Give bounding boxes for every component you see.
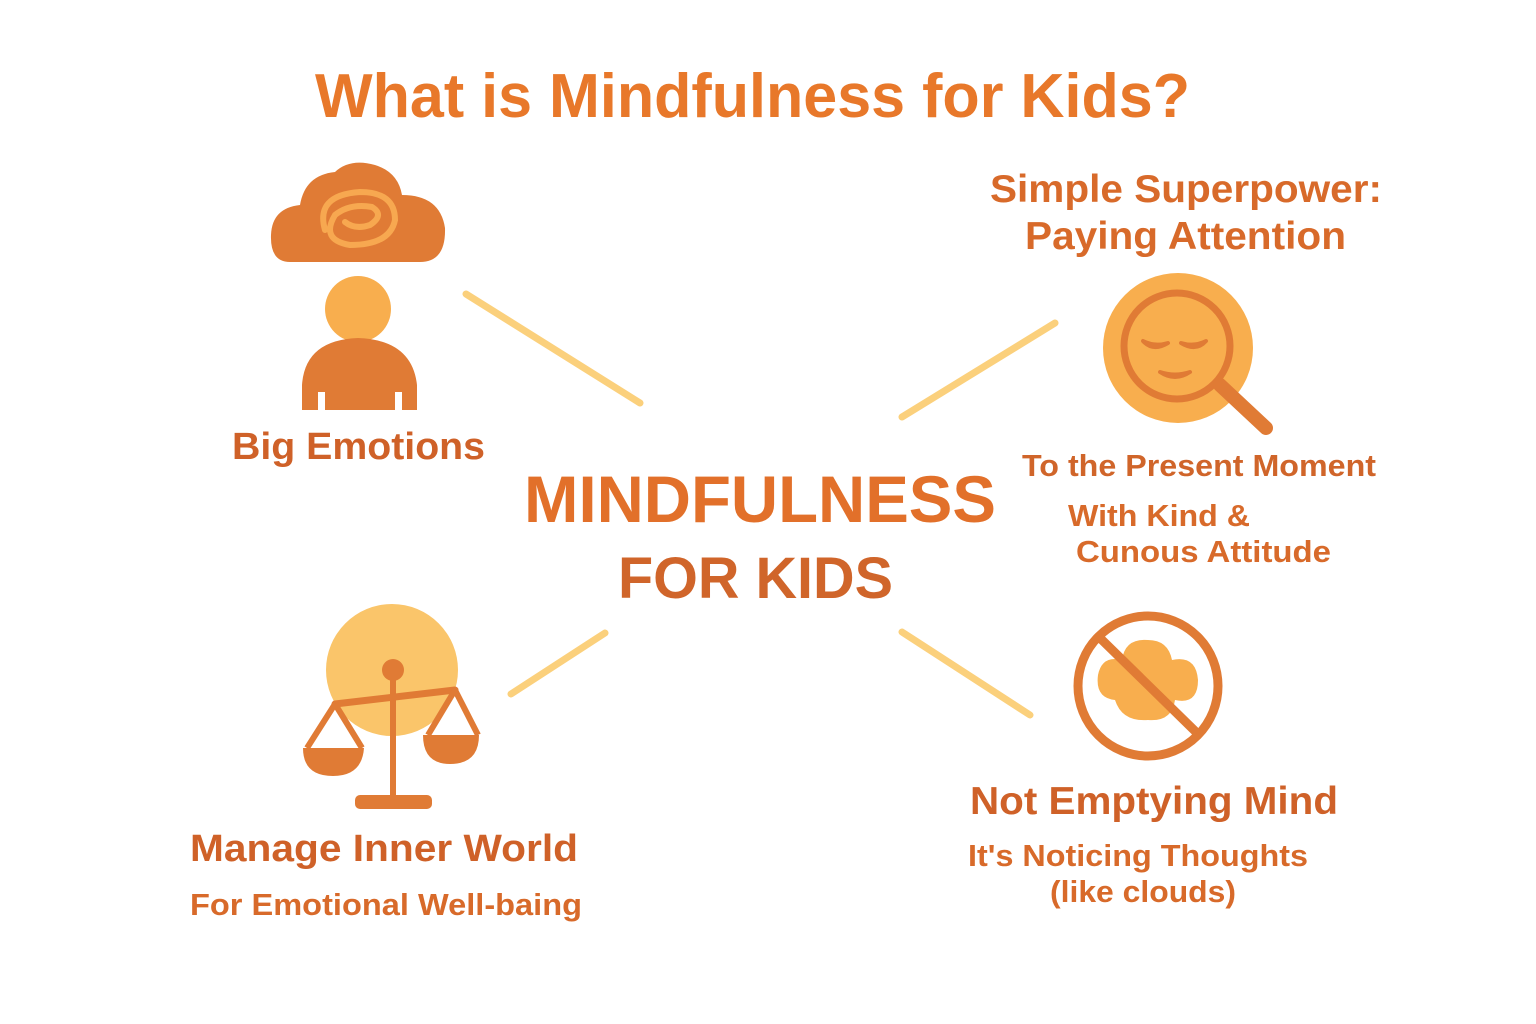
label: Big Emotions: Big Emotions <box>232 426 485 468</box>
text: present moment: With Kind & <box>1068 498 1250 533</box>
icon: no cloud <box>1078 616 1218 756</box>
label: Manage Inner World: For Emotional Well-baing <box>190 887 582 922</box>
icon: cloud with spiral above person <box>271 163 445 410</box>
connector lines <box>466 294 1055 715</box>
center heading: FOR KIDS <box>618 546 893 611</box>
heading: Simple Superpower: Paying Attention <box>1025 215 1346 258</box>
label: Not Emptying Mind <box>968 780 1338 909</box>
label: Manage Inner World: Manage Inner World <box>190 828 578 870</box>
text: present moment: To the Present Moment <box>1022 448 1376 483</box>
center heading: MINDFULNESS <box>524 462 996 536</box>
icon: balance scale with sun <box>303 604 479 809</box>
label: Not Emptying Mind: Not Emptying Mind <box>970 780 1338 823</box>
label: Not Emptying Mind: (like clouds) <box>1050 874 1236 909</box>
label: Manage Inner World <box>190 828 582 922</box>
title: What is Mindfulness for Kids? <box>315 62 1190 131</box>
text: present moment: Cunous Attitude <box>1076 534 1331 569</box>
heading: Simple Superpower: Simple Superpower: <box>990 168 1382 211</box>
center heading <box>524 462 996 611</box>
text: present moment <box>1022 448 1376 569</box>
label: Not Emptying Mind: It's Noticing Thoughts <box>968 838 1308 873</box>
icon: magnifier with calm face <box>1103 273 1266 428</box>
heading: Simple Superpower <box>990 168 1382 258</box>
